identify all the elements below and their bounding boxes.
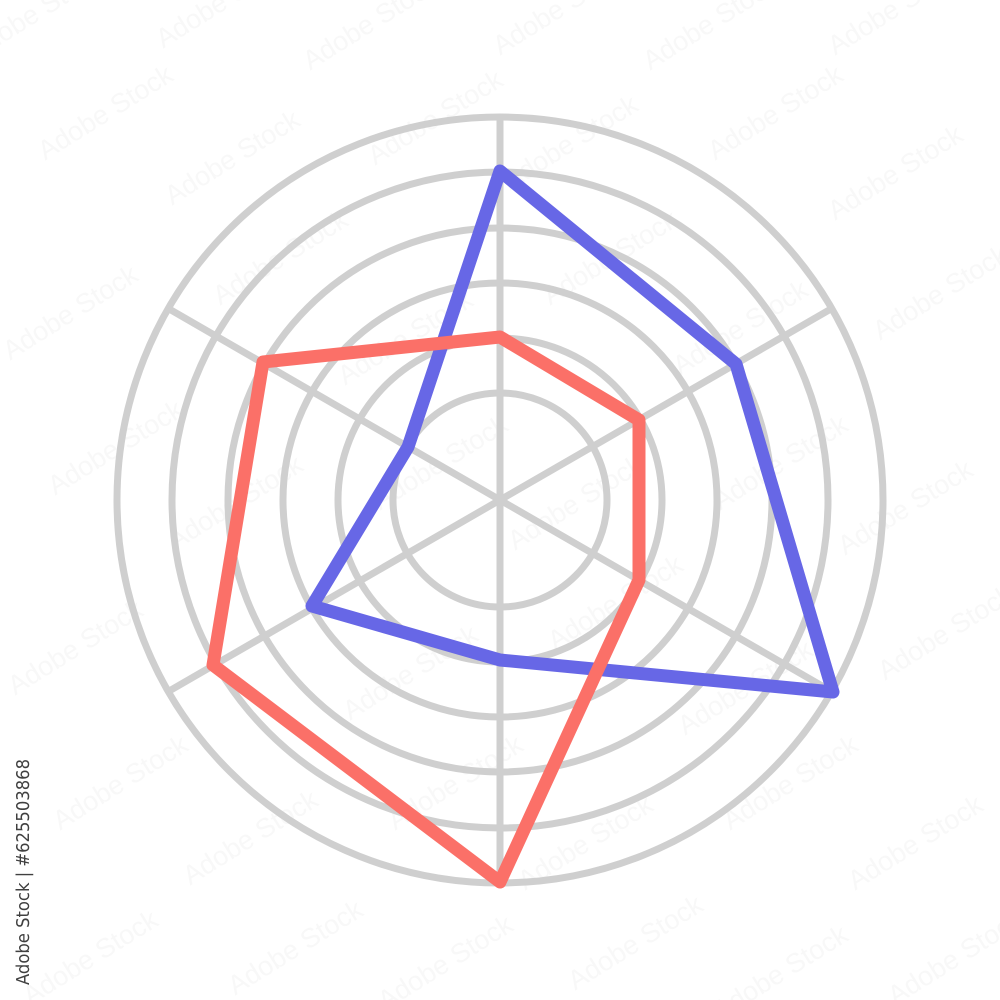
stock watermark pattern: Adobe Stock (822, 119, 969, 226)
stock watermark pattern: Adobe Stock (842, 789, 989, 896)
stock watermark pattern: Adobe Stock (159, 104, 306, 211)
stock watermark pattern: Adobe Stock (502, 449, 649, 556)
stock watermark pattern: Adobe Stock (2, 594, 149, 701)
stock watermark pattern: Adobe Stock (362, 64, 509, 171)
radar grid (117, 117, 883, 883)
stock watermark pattern: Adobe Stock (332, 284, 479, 391)
data series: blue polygon (312, 171, 833, 692)
data series: red polygon (213, 337, 639, 882)
stock watermark pattern: Adobe Stock (32, 59, 179, 166)
stock watermark pattern: Adobe Stock (702, 59, 849, 166)
stock watermark pattern: Adobe Stock (832, 454, 979, 561)
stock watermark pattern: Adobe Stock (707, 409, 854, 516)
stock watermark pattern: Adobe Stock (162, 449, 309, 556)
stock watermark pattern: Adobe Stock (0, 259, 144, 366)
stock watermark pattern: Adobe Stock (672, 634, 819, 741)
stock watermark pattern: Adobe Stock (537, 204, 684, 311)
stock watermark pattern: Adobe Stock (512, 789, 659, 896)
stock watermark pattern: Adobe Stock (382, 729, 529, 836)
stock watermark pattern: Adobe Stock (222, 894, 369, 1000)
stock watermark pattern: Adobe Stock (177, 784, 324, 891)
stock watermark pattern: Adobe Stock (667, 274, 814, 381)
stock watermark pattern: Adobe Stock (497, 89, 644, 196)
stock image credit: Adobe Stock | #625503868 (13, 759, 34, 985)
stock watermark pattern: Adobe Stock (42, 394, 189, 501)
stock watermark pattern: Adobe Stock (367, 409, 514, 516)
stock watermark pattern: Adobe Stock (337, 619, 484, 726)
stock watermark pattern: Adobe Stock (207, 204, 354, 311)
stock watermark pattern: Adobe Stock (542, 549, 689, 656)
stock watermark pattern: Adobe Stock (717, 729, 864, 836)
stock watermark pattern: Adobe Stock (562, 889, 709, 996)
stock watermark pattern: Adobe Stock (47, 729, 194, 836)
